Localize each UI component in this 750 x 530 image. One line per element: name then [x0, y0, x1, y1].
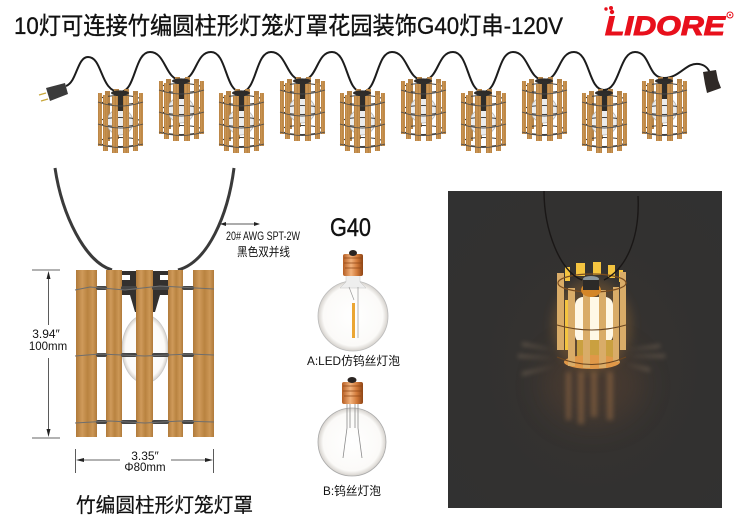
bulb size heading: G40: [330, 214, 371, 242]
night photo panel: [448, 191, 722, 508]
large lantern detail: [55, 168, 234, 437]
lantern 2: [159, 77, 204, 141]
large lantern bulb: [122, 315, 168, 383]
lantern 10: [642, 77, 687, 141]
title: 10灯可连接竹编圆柱形灯笼灯罩花园装饰G40灯串-120V: [14, 13, 563, 40]
lantern 5: [340, 89, 385, 153]
wire callout: 20# AWG SPT-2W: [226, 229, 301, 243]
logo: LIDORE: LIDORE: [605, 11, 726, 41]
lantern 3: [219, 89, 264, 153]
large lantern cord: [55, 168, 234, 270]
lantern 7: [461, 89, 506, 153]
wire callout: [220, 222, 301, 259]
height dimension: [29, 270, 67, 438]
large lantern slats: [76, 270, 214, 437]
inner glow: [552, 279, 632, 371]
height dimension: 100mm: [29, 341, 67, 353]
wire callout: 黑色双并线: [237, 245, 290, 259]
lantern 8: [522, 77, 567, 141]
width dimension: [76, 449, 214, 474]
bulb B label: B:钨丝灯泡: [323, 483, 381, 498]
floor glow: [543, 345, 643, 425]
lamp cord: [544, 191, 638, 280]
lantern 4: [280, 77, 325, 141]
bulb A: [318, 250, 388, 351]
lantern 9: [582, 89, 627, 153]
lantern 1: [98, 89, 143, 153]
icon: end socket: [703, 70, 721, 93]
bulb A label: A:LED仿钨丝灯泡: [307, 353, 400, 368]
floor reflections: [566, 372, 613, 424]
height dimension: 3.94″: [32, 327, 61, 341]
back slats lit: [565, 262, 623, 282]
width dimension: 3.35″: [131, 449, 160, 463]
lit bulb: [575, 297, 613, 343]
large lantern binding wires: [75, 286, 214, 423]
large lantern socket: [122, 271, 168, 312]
side light rays: [518, 342, 665, 376]
bulb B: [318, 377, 386, 476]
string light cord: [66, 52, 710, 92]
lantern caption: 竹编圆柱形灯笼灯罩: [76, 494, 253, 517]
width dimension: Φ80mm: [124, 462, 166, 474]
lit slats: [557, 272, 626, 368]
lantern 6: [401, 77, 446, 141]
wires: [557, 325, 626, 364]
icon: power plug: [39, 83, 68, 101]
logo: LIDORE: [604, 6, 733, 41]
lamp socket: [558, 274, 626, 297]
